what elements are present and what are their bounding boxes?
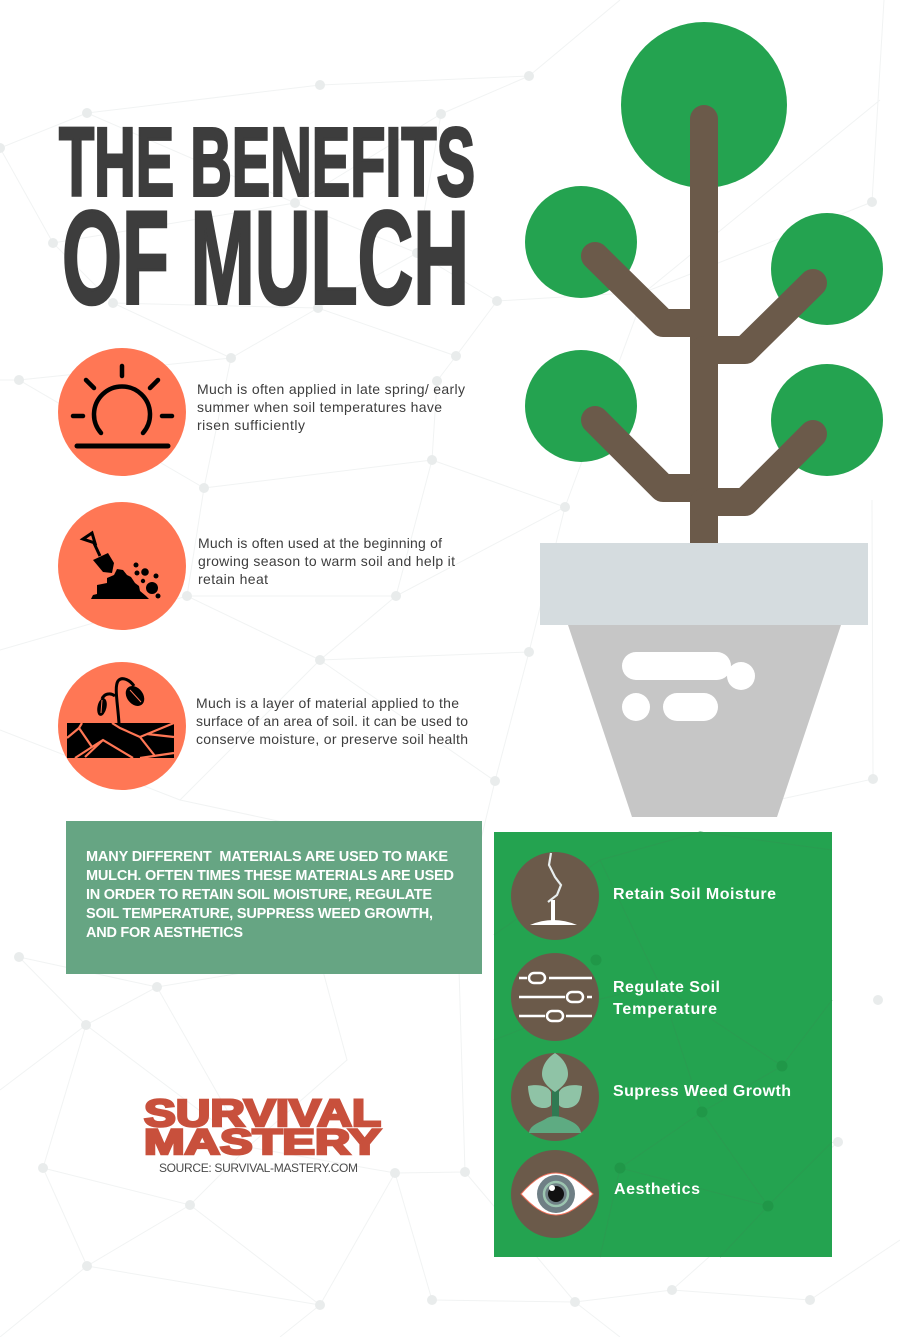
icon: shovel and soil [58,502,186,630]
pot highlights [622,652,755,721]
label: Regulate Soil [613,979,720,996]
source: SOURCE: SURVIVAL-MASTERY.COM [159,1161,358,1175]
icon: sunrise [58,348,186,476]
item: retain soil moisture [511,852,776,940]
title: OF MULCH [62,184,469,332]
text: Much is often used at the beginning of [198,535,442,551]
text [196,695,468,747]
title: THE BENEFITS [59,108,475,216]
label [613,979,720,1018]
tree trunk and branches [595,119,813,543]
callout: materials: MULCH. OFTEN TIMES THESE MATERIALS ARE USED [86,868,454,884]
tree foliage [525,22,883,476]
label: Retain Soil Moisture [613,886,776,903]
pot body [568,625,841,817]
text: Much is often applied in late spring/ early [197,381,465,397]
label: Temperature [613,1001,717,1018]
logo: survival mastery: MASTERY [144,1123,381,1162]
callout: materials [66,821,482,974]
callout: materials: MANY DIFFERENT MATERIALS ARE USED TO MAKE [86,849,448,865]
text: retain heat [198,571,268,587]
text: conserve moisture, or preserve soil health [196,731,468,747]
pot rim [540,543,868,625]
benefit 1: sun icon and text [58,348,465,476]
text: surface of an area of soil. it can be used to [196,713,468,729]
text: growing season to warm soil and help it [198,553,455,569]
item: aesthetics [511,1150,700,1238]
text [197,381,465,433]
callout: materials: IN ORDER TO RETAIN SOIL MOISTURE, REGULATE [86,887,432,903]
illustration: potted tree [525,22,883,817]
panel: uses of mulch [494,832,832,1257]
callout: materials: AND FOR AESTHETICS [86,925,243,941]
title [59,108,475,332]
text [198,535,455,587]
benefit 3: sprout icon and text [58,662,468,790]
text: summer when soil temperatures have [197,399,442,415]
label: Supress Weed Growth [613,1083,791,1100]
item: suppress weed growth [511,1053,791,1141]
logo: survival mastery [144,1093,381,1175]
item: regulate soil temperature [511,953,720,1041]
logo: survival mastery: SURVIVAL [144,1093,381,1135]
callout: materials: SOIL TEMPERATURE, SUPPRESS WEED GROWTH, [86,906,433,922]
text: Much is a layer of material applied to the [196,695,459,711]
benefit 2: shovel icon and text [58,502,455,630]
label: Aesthetics [614,1181,700,1198]
text: risen sufficiently [197,417,305,433]
icon: sprout in cracked soil [58,662,186,790]
